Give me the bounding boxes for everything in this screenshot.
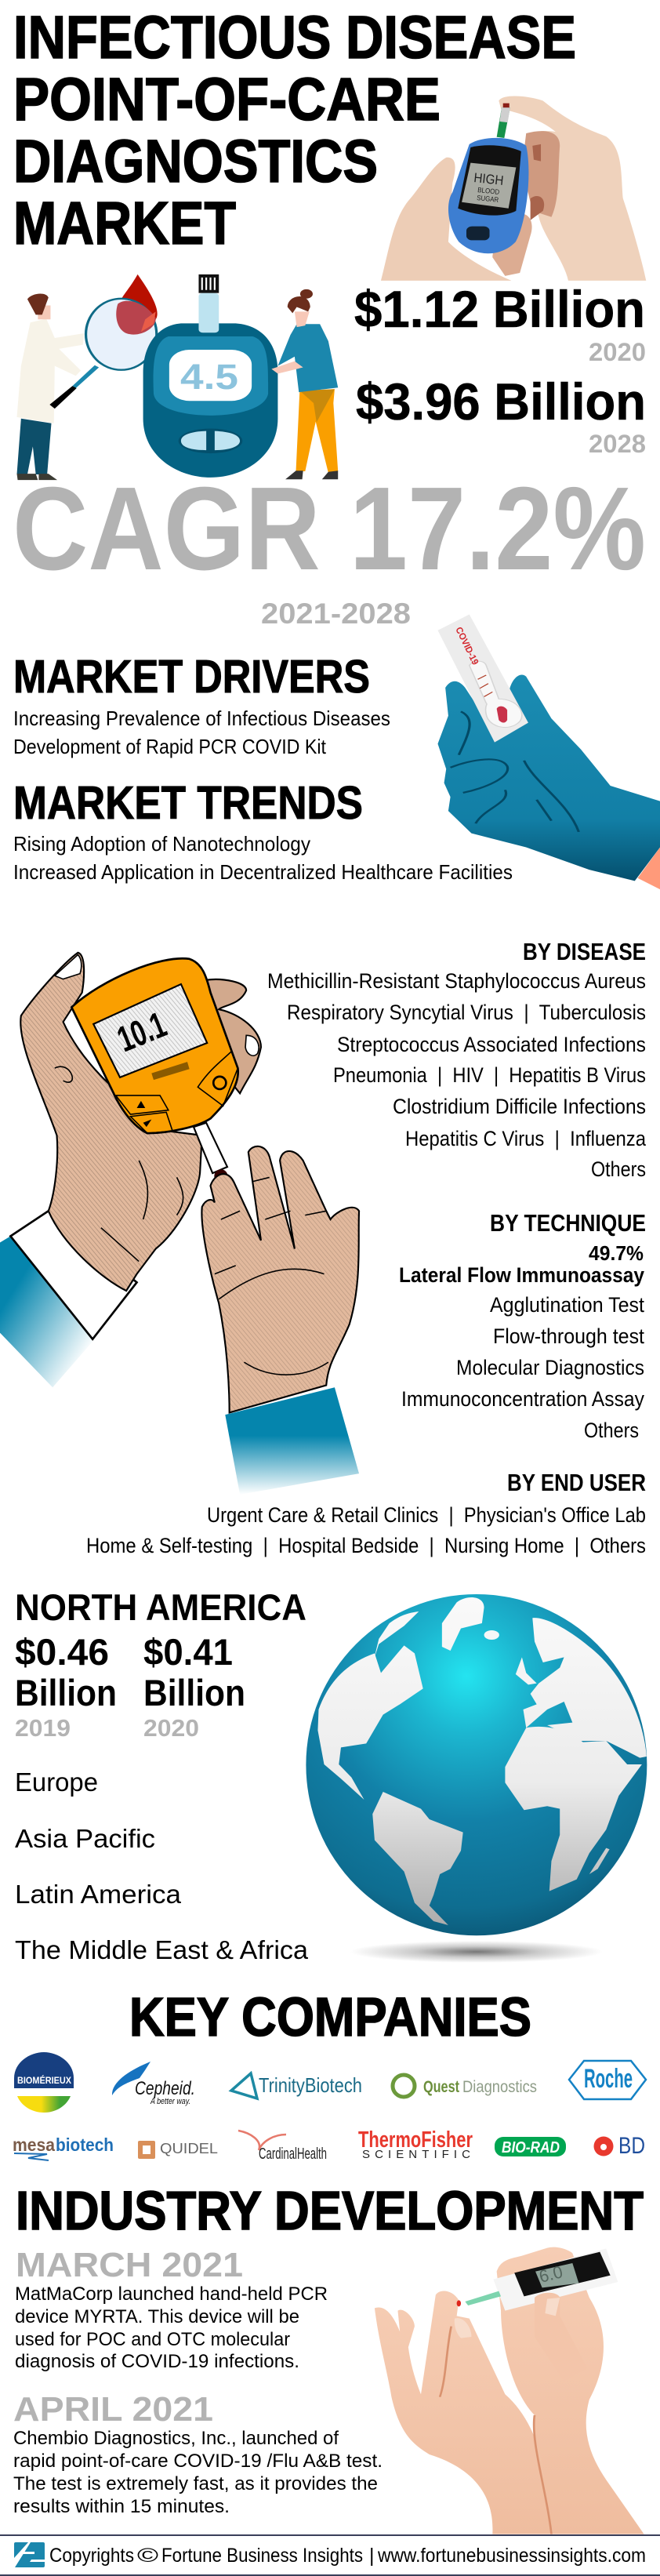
- development: April 2021: results within 15 minutes.: [13, 2496, 230, 2517]
- logo: Quest Diagnostics: Diagnostics: [462, 2078, 537, 2096]
- other regions: Latin America: [15, 1880, 182, 1909]
- market drivers: MARKET DRIVERS: [13, 651, 370, 703]
- right sleeve: [225, 1387, 359, 1495]
- heading: key companies: KEY COMPANIES: [129, 1986, 531, 2047]
- development: March 2021: [15, 2246, 328, 2372]
- logo: Roche: [569, 2061, 646, 2099]
- footer: copyright bar: Fortune Business Insights: [161, 2545, 363, 2567]
- regional figures: North America: Billion: [143, 1672, 245, 1713]
- market drivers: Increasing Prevalence of Infectious Diseases: [13, 707, 390, 730]
- logo: Quest Diagnostics: [393, 2075, 537, 2097]
- illustration: gloved hand with COVID test: [437, 615, 660, 889]
- title: INFECTIOUS DISEASE: [13, 4, 576, 71]
- market size figures: $1.12 Billion: [354, 280, 645, 338]
- footer: copyright bar: Copyrights: [49, 2545, 134, 2567]
- segment: by disease: [267, 938, 647, 1181]
- logo: Thermo Fisher Scientific: [358, 2127, 473, 2161]
- logo: Mesa Biotech: [13, 2135, 114, 2160]
- meter display text: SUGAR: [477, 194, 499, 204]
- illustration: doctor, blood drop, meter and nurse: [16, 274, 338, 480]
- regional figures: North America: 2019: [15, 1714, 71, 1742]
- logo: Mesa Biotech: biotech: [56, 2135, 114, 2155]
- segment: by technique: Flow-through test: [493, 1324, 644, 1348]
- development: April 2021: The test is extremely fast, as it provides the: [13, 2473, 378, 2494]
- logo: Cepheid: A better way.: [150, 2097, 190, 2106]
- logo: bioMérieux: [14, 2052, 74, 2113]
- development: March 2021: device MYRTA. This device will be: [15, 2306, 299, 2327]
- regional figures: North America: 2020: [143, 1714, 199, 1742]
- regional figures: North America: [15, 1586, 306, 1742]
- segment: by technique: [399, 1209, 646, 1442]
- meter reading sketch: 10.1: [111, 1004, 172, 1059]
- other regions: The Middle East & Africa: [15, 1935, 309, 1964]
- left hand: [20, 953, 261, 1291]
- title: MARKET: [13, 190, 236, 257]
- logo: Quidel: QUIDEL: [160, 2141, 218, 2156]
- other regions: Europe: [15, 1768, 98, 1797]
- device reading: 6.0: [537, 2262, 564, 2287]
- development: April 2021: [13, 2390, 383, 2517]
- segment: by technique: Molecular Diagnostics: [456, 1356, 644, 1379]
- logo: BD: [594, 2133, 645, 2159]
- meter display text: HIGH: [473, 170, 504, 188]
- development: March 2021: used for POC and OTC molecular: [15, 2329, 290, 2350]
- logo: bioMérieux: BIOMÉRIEUX: [17, 2074, 71, 2086]
- market trends: Increased Application in Decentralized Healthcare Facilities: [13, 860, 513, 884]
- development: March 2021: diagnosis of COVID-19 infections.: [15, 2351, 299, 2372]
- other regions: [15, 1768, 309, 1964]
- development: April 2021: Chembio Diagnostics, Inc., launched of: [13, 2428, 339, 2449]
- logo: Quest Diagnostics: Quest: [423, 2078, 459, 2096]
- meter display text: BLOOD: [477, 186, 500, 196]
- magnifier and blood drop: [49, 274, 158, 409]
- market size figures: [354, 280, 646, 458]
- regional figures: North America: NORTH AMERICA: [15, 1586, 306, 1628]
- logo: Trinity Biotech: [231, 2073, 362, 2098]
- market size figures: $3.96 Billion: [356, 372, 646, 431]
- logo: Thermo Fisher Scientific: SCIENTIFIC: [362, 2148, 470, 2161]
- meter reading: 4.5: [180, 357, 238, 397]
- logo: Cardinal Health: [238, 2131, 327, 2163]
- development: April 2021: APRIL 2021: [13, 2390, 213, 2429]
- segment: by end user: [86, 1469, 646, 1557]
- segment: by technique: Agglutination Test: [490, 1293, 644, 1317]
- title: [13, 4, 576, 257]
- footer: copyright bar: |: [369, 2545, 375, 2567]
- left sleeve and cuff: [0, 1211, 137, 1387]
- photo: hands with glucose meter and lancet: [375, 2247, 644, 2534]
- test card label: COVID-19: [453, 625, 481, 667]
- logo: Thermo Fisher Scientific: ThermoFisher: [358, 2127, 473, 2153]
- regional figures: North America: $0.41: [143, 1631, 233, 1673]
- doctor: [16, 294, 84, 480]
- right hand: [201, 1146, 359, 1412]
- development: April 2021: rapid point-of-care COVID-19 /Flu A&B test.: [13, 2451, 383, 2472]
- illustration: globe: [306, 1594, 647, 1963]
- logo: Trinity Biotech: TrinityBiotech: [259, 2073, 362, 2097]
- market drivers: Development of Rapid PCR COVID Kit: [13, 735, 327, 758]
- development: March 2021: MARCH 2021: [16, 2246, 243, 2284]
- footer: copyright bar: [0, 2534, 660, 2576]
- segment: by technique: Others: [584, 1419, 639, 1442]
- footer: copyright bar: ©: [137, 2545, 159, 2567]
- logo: Cardinal Health: CardinalHealth: [259, 2145, 327, 2163]
- development: March 2021: MatMaCorp launched hand-held PCR: [15, 2284, 328, 2305]
- footer logo: [14, 2542, 45, 2567]
- photo: hands holding glucose meter: [381, 96, 646, 281]
- market size figures: 2020: [589, 338, 646, 366]
- market trends: Rising Adoption of Nanotechnology: [13, 832, 310, 856]
- regional figures: North America: Billion: [15, 1672, 117, 1713]
- logo: Cepheid: Cepheid.: [135, 2078, 195, 2099]
- logo: Bio-Rad: BIO-RAD: [502, 2139, 560, 2156]
- meter display text: [473, 170, 504, 204]
- market size figures: 2028: [589, 430, 646, 458]
- CAGR headline: 2021-2028: [261, 598, 411, 630]
- other regions: Asia Pacific: [15, 1824, 155, 1853]
- logo: Cepheid: [112, 2062, 195, 2106]
- title: POINT-OF-CARE: [13, 66, 441, 133]
- illustration: sketched hands testing blood: [0, 953, 359, 1495]
- segment: by technique: Immunoconcentration Assay: [401, 1387, 644, 1411]
- orange meter: [71, 958, 238, 1183]
- market drivers: [13, 651, 390, 758]
- title: DIAGNOSTICS: [13, 128, 378, 195]
- segment: by technique: 49.7%: [589, 1241, 644, 1265]
- market trends: MARKET TRENDS: [13, 777, 363, 829]
- segment: by disease: Others: [591, 1157, 646, 1181]
- logo: Mesa Biotech: mesa: [13, 2135, 55, 2155]
- regional figures: North America: $0.46: [15, 1631, 109, 1673]
- large meter: [143, 274, 277, 478]
- market trends: [13, 777, 513, 884]
- logo: Quidel: [138, 2141, 218, 2159]
- logo: BD: BD: [618, 2133, 645, 2159]
- nurse: [271, 289, 338, 479]
